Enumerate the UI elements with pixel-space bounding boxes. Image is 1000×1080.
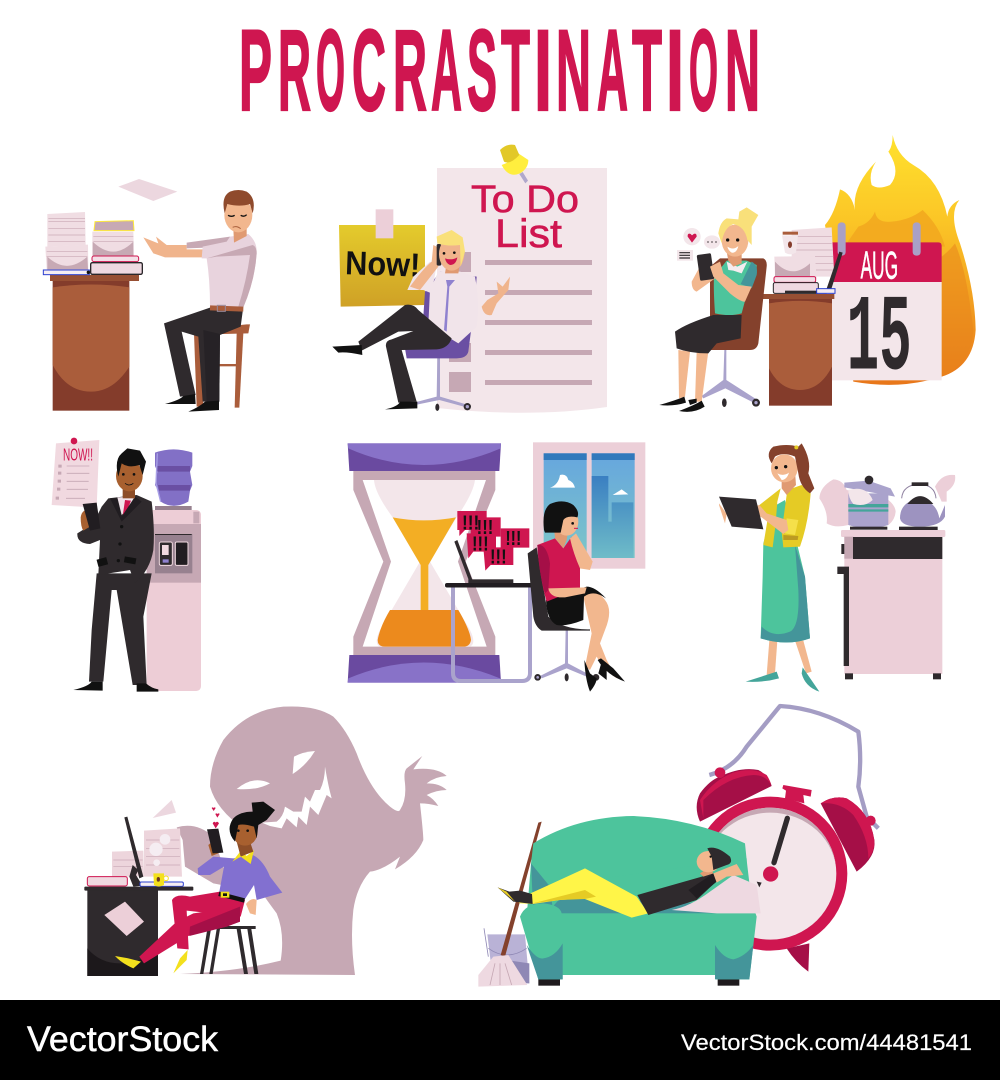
desk frame and top [445, 583, 538, 681]
title: S [467, 7, 497, 135]
sofa legs [538, 978, 739, 986]
steam cloud [819, 479, 896, 526]
man: trousers and shoes [164, 308, 243, 412]
scene: man at water cooler [52, 438, 201, 692]
scene: hourglass with desk worker [348, 443, 501, 683]
man legs and shoes [73, 573, 158, 692]
woman dress [761, 500, 810, 642]
woman trousers and shoes [115, 892, 245, 973]
woman belt [218, 892, 245, 903]
to do list paper [437, 168, 607, 413]
title: A [431, 7, 462, 135]
calendar [832, 222, 942, 401]
flame [825, 135, 976, 385]
scene: man on the phone in chair [332, 209, 510, 411]
social media bubbles [677, 228, 720, 261]
title: T [501, 7, 530, 135]
man: head [223, 190, 254, 243]
phone in hand [81, 503, 100, 531]
calendar: 15 [847, 278, 912, 401]
man: shirt and arms [143, 234, 257, 312]
woman top and arms [692, 253, 757, 315]
title: I [534, 7, 552, 135]
title: O [316, 7, 345, 135]
man trousers and shoes [332, 305, 452, 409]
scene: burning calendar deadline [659, 135, 976, 412]
to do list heading: To Do [471, 179, 579, 221]
push pin [500, 145, 528, 183]
cooking pot [844, 476, 895, 530]
woman arm [751, 505, 788, 534]
woman head [718, 207, 758, 267]
hourglass caps [348, 443, 501, 683]
watermark bar [0, 1000, 1000, 1080]
woman head [543, 501, 578, 548]
papers and steam [112, 828, 182, 877]
woman yellow cardigan [757, 485, 811, 547]
stool [200, 926, 258, 974]
calendar: AUG [861, 243, 898, 287]
title: O [689, 7, 718, 135]
woman head [769, 443, 814, 495]
checklist lines [449, 252, 592, 392]
alert speech bubbles: !!! [462, 512, 479, 534]
floating hearts [212, 807, 220, 828]
woman legs and shoes [746, 641, 819, 692]
watermark logo text: VectorStock [27, 1020, 219, 1059]
woman blouse and arm [537, 533, 593, 602]
woman sweater and arms [198, 850, 282, 915]
scene: woman by window [528, 442, 645, 692]
now note paper [52, 438, 99, 508]
sofa back [527, 816, 753, 917]
coffee cup [782, 232, 798, 254]
hourglass glass [374, 480, 475, 647]
hourglass frame [353, 471, 495, 655]
scene: shadow monster and woman on phone [84, 706, 447, 976]
laptop [454, 540, 513, 583]
now note paper: NOW!! [63, 445, 93, 465]
watermark url: VectorStock.com/44481541 [681, 1030, 972, 1055]
title: P [239, 7, 272, 135]
scene: woman with tablet and kitchen stove [719, 443, 955, 692]
papers, books and laptop [773, 227, 843, 294]
alert speech bubbles: !!! [490, 546, 507, 568]
brown desk [762, 294, 834, 406]
man raised hand [482, 277, 510, 315]
title: T [632, 7, 662, 135]
alarm clock [693, 785, 847, 972]
monster shadow [153, 706, 447, 975]
alarm bells [697, 767, 876, 872]
monitor and books [87, 817, 183, 887]
mop bucket [484, 928, 529, 983]
man: wooden stool [190, 324, 250, 408]
man head [437, 230, 465, 273]
office chair [405, 272, 477, 411]
kettle [899, 475, 955, 530]
paper stacks and books [43, 212, 142, 275]
text: N [725, 7, 760, 135]
water cooler [147, 506, 201, 691]
bell wire [709, 706, 878, 828]
woman legs [583, 592, 625, 692]
chair [528, 547, 599, 681]
water bottle [155, 449, 192, 506]
black desk [84, 887, 193, 976]
sticky note now [339, 209, 425, 307]
man shirt and arm [407, 244, 478, 343]
sand [378, 517, 471, 647]
brown chair [702, 258, 767, 407]
phone and hand [207, 829, 223, 856]
alert speech bubbles: !!! [477, 517, 493, 539]
woman head [230, 802, 275, 857]
alert speech bubbles [457, 511, 529, 571]
man jacket and arms [77, 495, 154, 583]
woman skirt [546, 587, 606, 625]
tablet [719, 497, 763, 529]
mop [478, 822, 542, 987]
lying man [498, 848, 762, 918]
title: R [393, 7, 427, 135]
title: C [352, 7, 386, 135]
flying paper [118, 179, 177, 201]
brown desk [50, 275, 139, 411]
title: I [666, 7, 684, 135]
sticky note now: Now! [345, 245, 421, 285]
scene: man on sofa with alarm clock [478, 706, 878, 987]
woman skirt [675, 315, 742, 353]
alert speech bubbles: !!! [505, 528, 521, 550]
title: A [597, 7, 628, 135]
sofa seat and arms [520, 903, 757, 979]
stove [837, 530, 945, 679]
scene: man pushing away desk work [43, 179, 257, 412]
scene: to do list board [437, 145, 607, 413]
man head [116, 448, 146, 498]
scene: to do list board: List [495, 212, 562, 256]
alert speech bubbles: !!! [472, 534, 489, 556]
coffee mug [153, 873, 168, 887]
title: R [278, 7, 311, 135]
title: N [556, 7, 591, 135]
woman legs and shoes [659, 350, 708, 412]
window [533, 442, 645, 569]
